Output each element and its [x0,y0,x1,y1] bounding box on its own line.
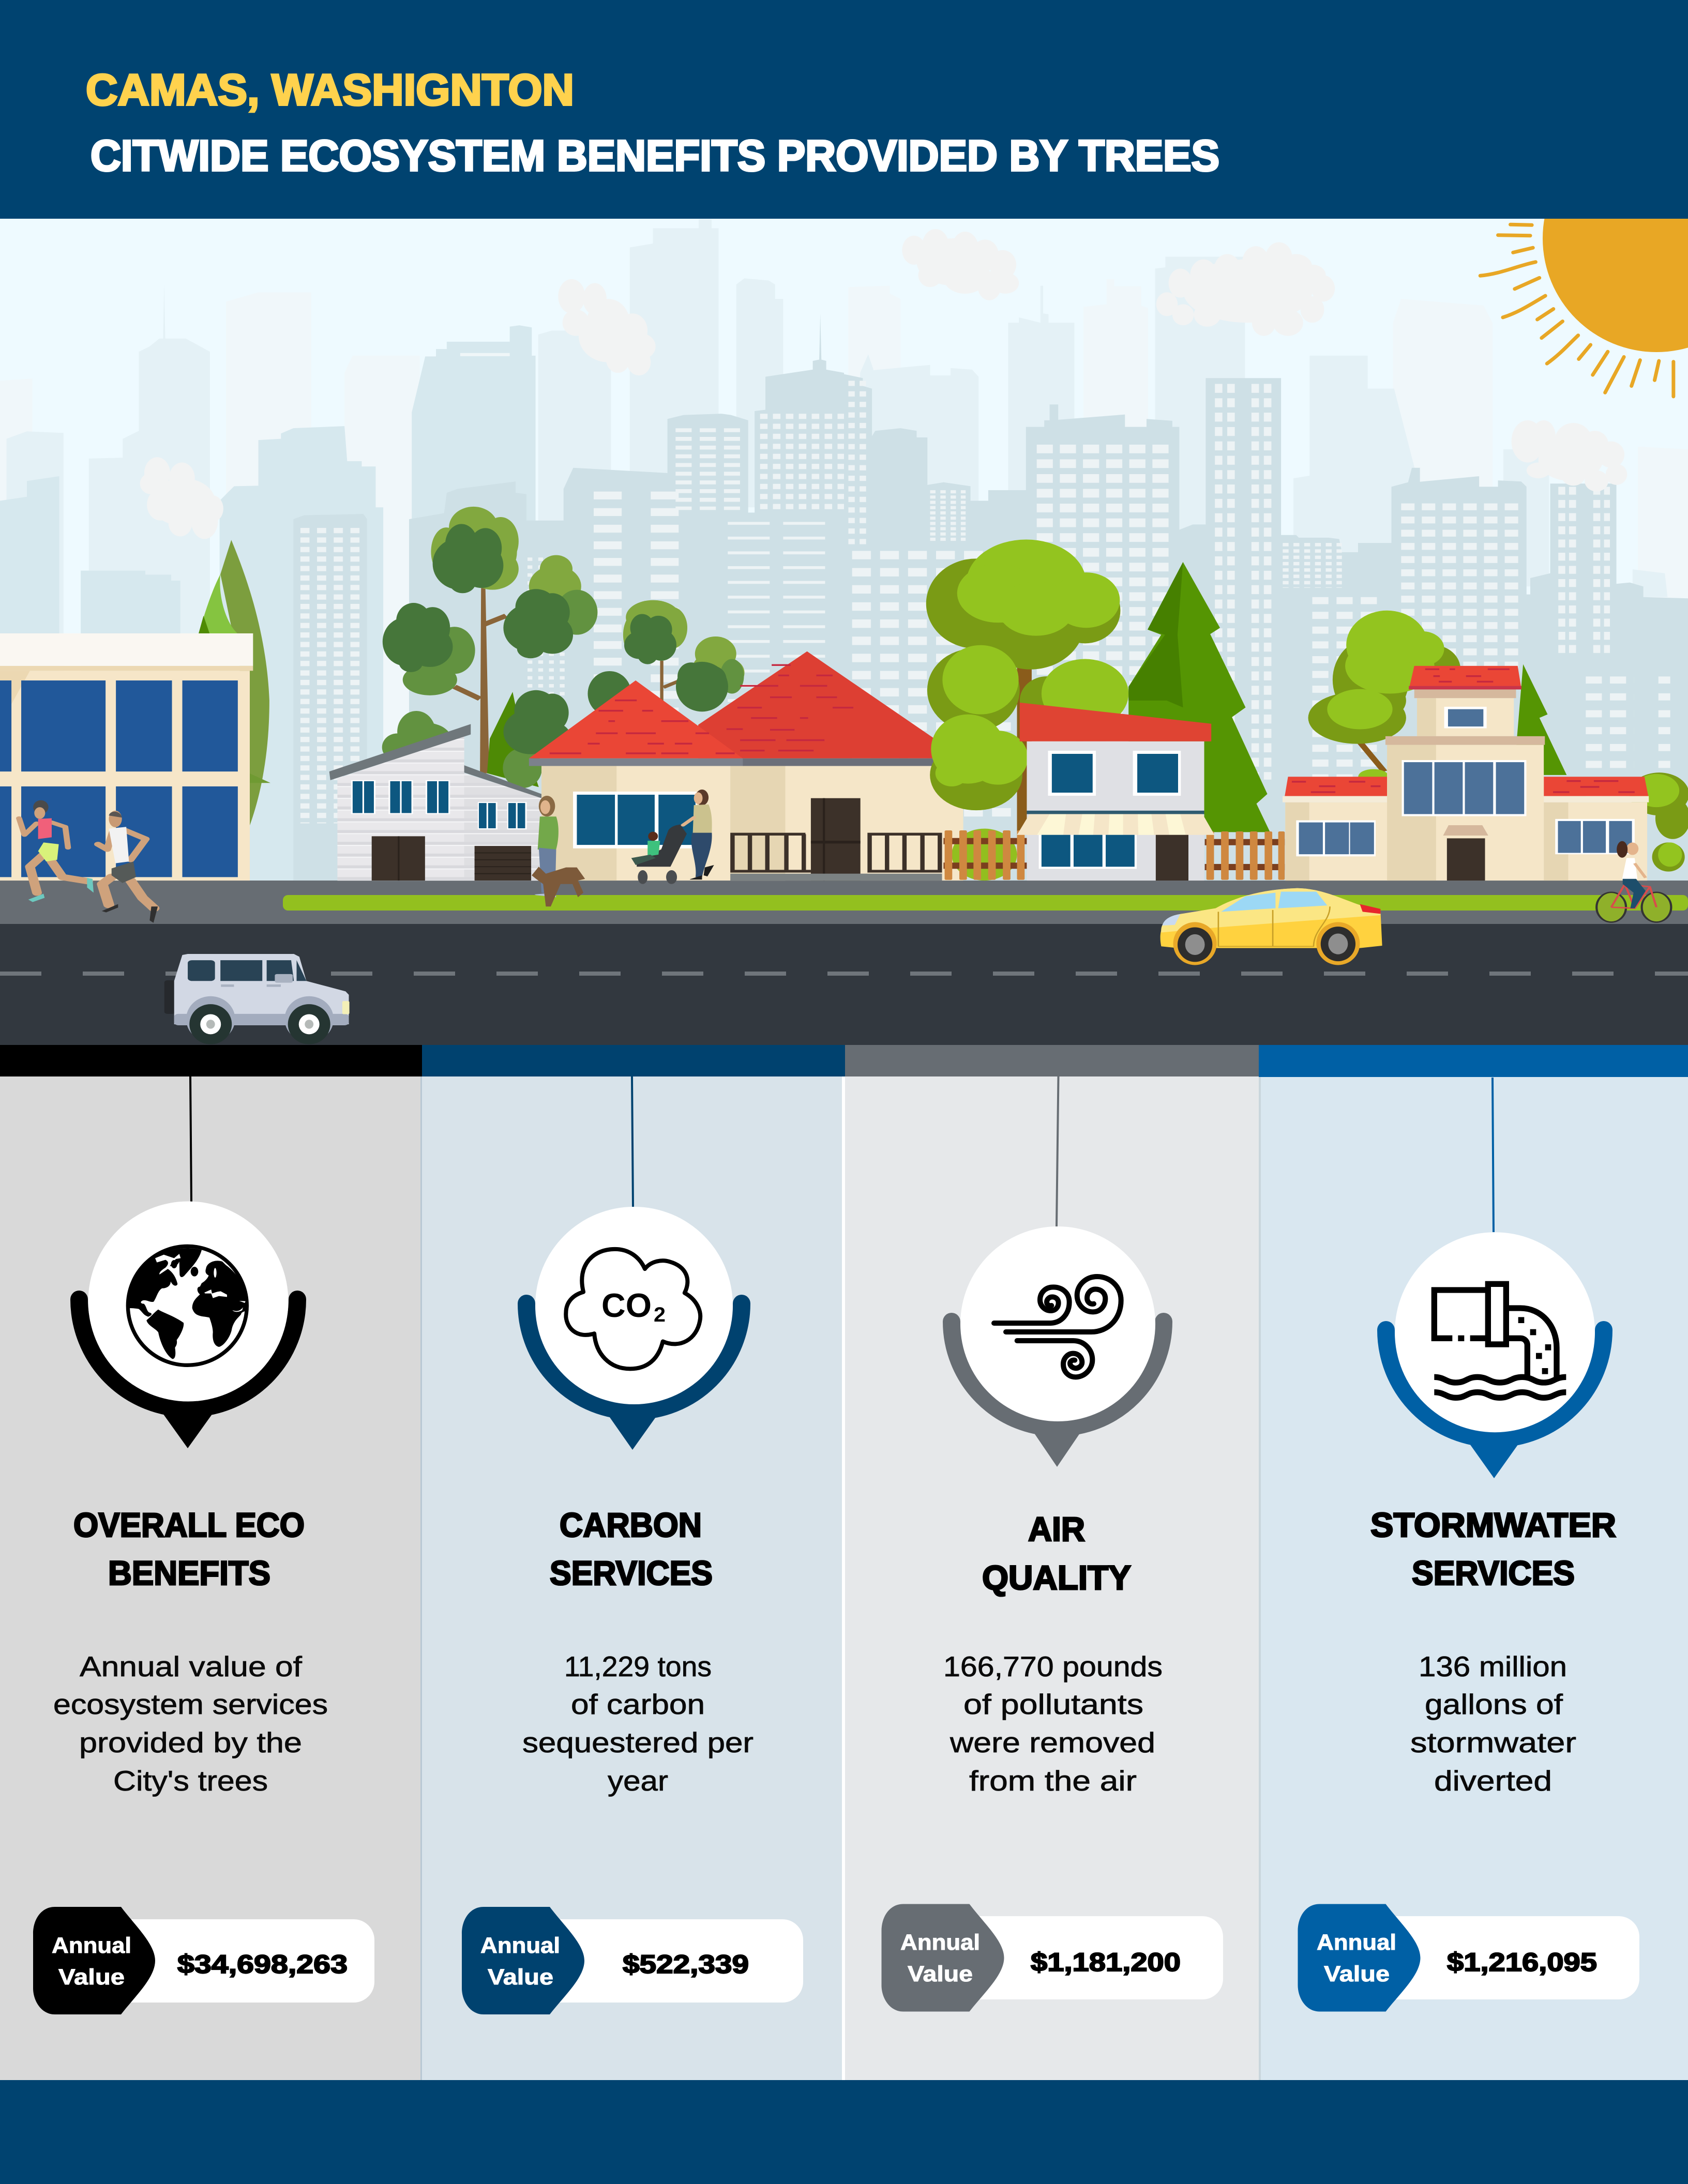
value badge [881,1904,1223,2011]
sky [0,219,1688,891]
heading: OVERALL ECO [73,1506,305,1544]
heading: SERVICES [1412,1554,1575,1592]
scene left: trees, buildings, people [0,507,963,1044]
icon: CO2 cloud pin [526,1207,742,1450]
value badge: $34,698,263 [177,1950,348,1979]
fence [943,829,1285,881]
house: large beige [1283,666,1649,881]
house: two-storey with awning [1017,703,1215,881]
panel: carbon services [422,1045,845,2080]
description: year [608,1765,668,1797]
value badge: Value [1324,1962,1390,1986]
description: 11,229 tons [564,1650,712,1682]
icon: CO2 cloud pin: 2 [654,1303,666,1326]
title: subtitle: CITWIDE ECOSYSTEM BENEFITS PROVIDED BY TREES [91,131,1219,180]
value badge: $522,339 [623,1950,749,1979]
house: beige with red roof [529,651,963,881]
panel: air quality [845,1045,1261,2080]
description: Annual value of [80,1650,303,1682]
icon: stormwater pipe pin [1386,1232,1604,1478]
description: 136 million [1419,1650,1567,1682]
tree: pine [1128,562,1270,832]
sun [1480,125,1688,397]
heading [1370,1506,1616,1592]
value badge [462,1907,803,2014]
skyline: left half [0,219,844,881]
heading [982,1510,1131,1597]
description: ecosystem services [53,1688,328,1720]
description: sequestered per [522,1726,753,1758]
description [943,1650,1163,1797]
description: City's trees [113,1765,268,1797]
building: blue window office [0,633,253,881]
heading: BENEFITS [108,1554,270,1592]
illustration: city street scene [0,125,1688,1045]
figure: woman with stroller [631,790,714,884]
value badge: Annual [900,1930,980,1955]
header band [0,0,1688,219]
icon: globe pin [79,1202,297,1448]
value badge: $1,181,200 [1031,1948,1181,1977]
heading: AIR [1028,1510,1085,1548]
description: 166,770 pounds [943,1650,1163,1682]
house: grey siding [329,724,541,881]
description: diverted [1434,1765,1552,1797]
description: stormwater [1410,1726,1576,1758]
scene right: trees, buildings, vehicles [926,540,1688,965]
title: city name: CAMAS, WASHIGNTON [86,66,574,115]
tree: right cluster behind house [1308,611,1688,872]
tree: tall leaf [199,540,270,827]
tree: small pair behind roof [587,600,745,716]
icon: CO2 cloud pin: CO [601,1286,652,1324]
heading: STORMWATER [1370,1506,1616,1544]
heading [73,1506,305,1592]
icon: wind pin [952,1226,1164,1467]
value badge: Value [908,1962,973,1986]
heading: SERVICES [550,1554,713,1592]
description: of carbon [571,1688,705,1720]
value badge: Annual [52,1933,131,1958]
tree: large with branches [382,507,597,788]
vehicle: white SUV [164,954,350,1044]
footer band [0,2080,1688,2184]
panel: stormwater services [1259,1045,1688,2080]
heading: CARBON [560,1506,702,1544]
figure: female runner [19,800,94,902]
figure: woman with dog [532,796,585,906]
value badge: Value [488,1965,553,1990]
figure: cyclist [1596,841,1671,922]
heading: QUALITY [982,1558,1131,1597]
skyline: right half [844,229,1688,881]
clouds [140,279,656,539]
road and sidewalk [0,881,1688,1045]
description: provided by the [79,1726,302,1758]
value badge: Annual [1317,1930,1396,1955]
description: gallons of [1425,1688,1563,1720]
value badge: Annual [480,1933,560,1958]
description: of pollutants [963,1688,1143,1720]
figure: male runner [98,811,158,923]
heading [550,1506,713,1592]
clouds [902,229,1627,492]
value badge: Value [58,1965,125,1990]
panel: overall eco benefits [0,1045,422,2080]
description [1410,1650,1576,1797]
description [53,1650,328,1797]
value badge: $1,216,095 [1447,1948,1597,1977]
value badge [33,1907,374,2014]
description: from the air [969,1765,1137,1797]
description: were removed [950,1726,1155,1758]
tree: big light green [926,540,1128,832]
description [522,1650,753,1797]
value badge [1298,1904,1639,2011]
vehicle: yellow car [1160,888,1382,965]
